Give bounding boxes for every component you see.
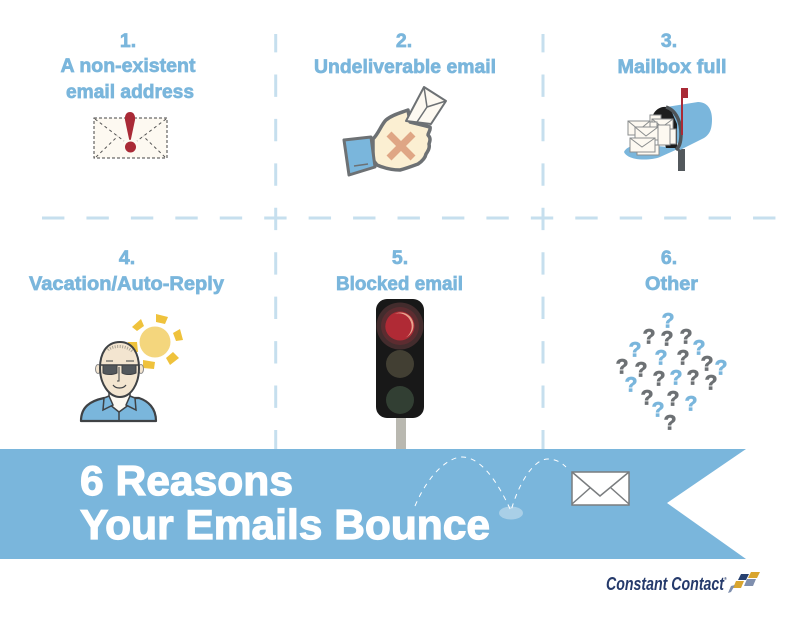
icon: cloud of question marks: ? xyxy=(625,374,637,396)
title: Your Emails Bounce xyxy=(80,501,490,548)
icon: cloud of question marks: ? xyxy=(687,366,699,390)
heading: reason 3: Mailbox full xyxy=(618,56,726,78)
icon: cloud of question marks: ? xyxy=(670,366,682,390)
icon: cloud of question marks: ? xyxy=(701,352,713,376)
icon: bouncing envelope path xyxy=(415,457,629,520)
icon: cloud of question marks: ? xyxy=(667,388,679,410)
heading: reason 6: Other xyxy=(645,273,698,295)
icon: traffic light xyxy=(376,299,424,450)
icon: envelope with exclamation mark xyxy=(94,112,167,158)
icon: man with sunglasses and sun xyxy=(81,314,183,421)
icon: cloud of question marks: ? xyxy=(662,310,674,332)
icon: cloud of question marks: ? xyxy=(641,386,653,410)
icon: cloud of question marks: ? xyxy=(677,346,689,370)
heading: reason 1: email address xyxy=(66,81,194,103)
icon: cloud of question marks: ? xyxy=(635,358,647,382)
logo: Constant Contact: ® xyxy=(724,576,727,581)
icon: cloud of question marks: ? xyxy=(653,368,665,390)
icon: overflowing mailbox xyxy=(624,88,712,171)
icon: cloud of question marks: ? xyxy=(655,346,667,370)
heading: reason 2: 2. xyxy=(396,30,412,52)
heading: reason 1: A non-existent xyxy=(60,55,196,77)
icon: cloud of question marks: ? xyxy=(643,326,655,348)
icon: cloud of question marks: ? xyxy=(616,356,628,378)
heading: reason 4: Vacation/Auto-Reply xyxy=(29,273,224,295)
icon: cloud of question marks: ? xyxy=(661,328,673,350)
heading: reason 4: 4. xyxy=(119,247,135,269)
title: 6 Reasons xyxy=(80,457,293,504)
heading: reason 3: 3. xyxy=(661,30,677,52)
icon: cloud of question marks: ? xyxy=(652,398,664,422)
icon: cloud of question marks: ? xyxy=(715,356,727,380)
heading: reason 2: Undeliverable email xyxy=(314,56,496,78)
heading: reason 1: 1. xyxy=(120,30,136,52)
icon: hand holding envelope with X xyxy=(344,87,446,175)
heading: reason 5: Blocked email xyxy=(336,273,463,295)
icon: cloud of question marks: ? xyxy=(705,372,717,394)
icon: cloud of question marks: ? xyxy=(664,412,676,434)
heading: reason 5: 5. xyxy=(392,247,408,269)
icon: cloud of question marks: ? xyxy=(693,336,705,360)
icon: cloud of question marks: ? xyxy=(629,338,641,362)
logo: Constant Contact: Constant Contact xyxy=(606,574,725,594)
icon: cloud of question marks: ? xyxy=(680,326,692,348)
heading: reason 6: 6. xyxy=(661,247,677,269)
icon: cloud of question marks xyxy=(616,310,727,434)
banner ribbon xyxy=(0,449,746,559)
icon: cloud of question marks: ? xyxy=(685,392,697,416)
